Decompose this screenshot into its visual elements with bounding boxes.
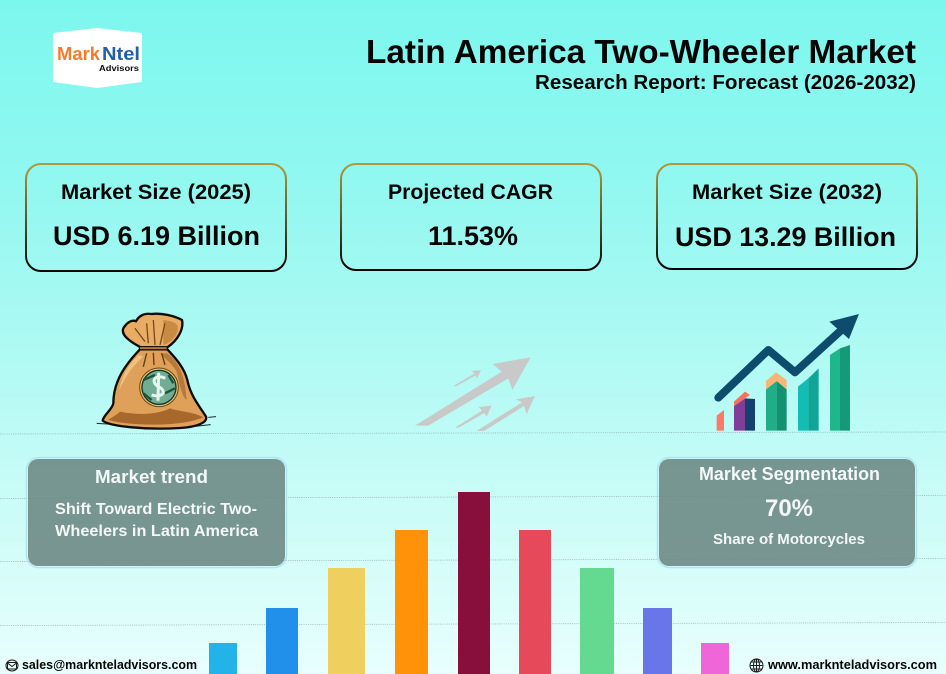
- panel: market trend: [26, 458, 286, 568]
- icon: growth bar chart with arrow: [717, 314, 859, 431]
- panel: market trend: Shift Toward Electric Two-: [55, 501, 257, 518]
- panel: market segmentation: [658, 458, 916, 568]
- panel: market trend: Wheelers in Latin America: [55, 523, 258, 540]
- icon: money bag: [97, 314, 216, 429]
- stat card: market size 2025: [26, 164, 286, 271]
- stat card: projected CAGR: 11.53%: [428, 221, 518, 251]
- title: Latin America Two-Wheeler Market: [366, 33, 916, 70]
- footer website: www.marknteladvisors.com: [767, 657, 937, 672]
- stat card: market size 2025: Market Size (2025): [61, 181, 251, 204]
- panel: market trend: Market trend: [95, 467, 208, 487]
- stat card: market size 2032: Market Size (2032): [692, 181, 882, 204]
- logo: Ntel: [102, 44, 140, 64]
- panel: market segmentation: Market Segmentation: [699, 464, 880, 484]
- panel: market segmentation: Share of Motorcycles: [713, 531, 865, 548]
- stat card: market size 2032: USD 13.29 Billion: [675, 222, 896, 252]
- logo: Mark: [57, 44, 101, 64]
- logo: [53, 28, 142, 88]
- icon: email: [6, 660, 18, 671]
- stat card: market size 2032: [657, 164, 917, 269]
- logo: Advisors: [99, 63, 139, 73]
- icon: grey growth arrows: [415, 357, 535, 431]
- bar chart: [209, 492, 729, 674]
- footer email: sales@marknteladvisors.com: [22, 657, 197, 672]
- stat card: market size 2025: USD 6.19 Billion: [53, 221, 260, 251]
- icon: globe: [750, 659, 763, 672]
- stat card: projected CAGR: Projected CAGR: [388, 181, 553, 204]
- panel: market segmentation: 70%: [765, 495, 813, 522]
- stat card: projected CAGR: [341, 164, 601, 270]
- subtitle: Research Report: Forecast (2026-2032): [535, 72, 916, 94]
